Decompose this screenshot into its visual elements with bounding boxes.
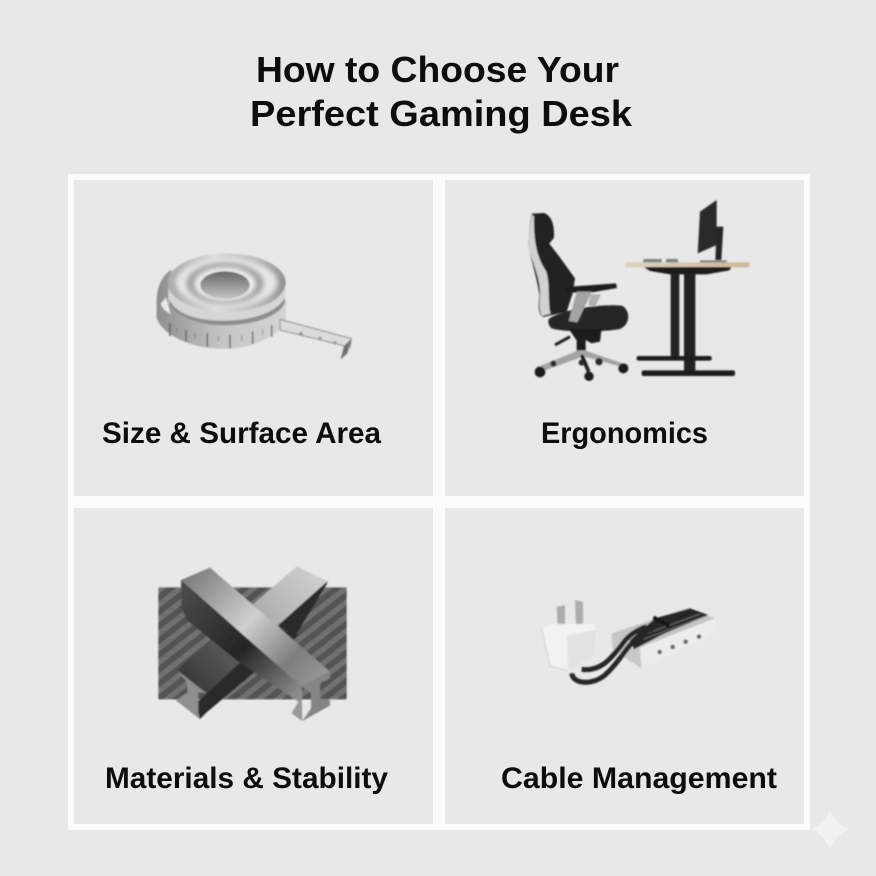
- icon: steel beams on carbon fibre: [158, 567, 347, 721]
- panel: cable management: [501, 600, 777, 795]
- icon: sparkle watermark: [811, 810, 849, 849]
- title: [250, 49, 633, 134]
- panel: size and surface area: [102, 253, 381, 450]
- panel: ergonomics: [529, 200, 749, 450]
- icon: chair and standing desk: [529, 200, 749, 381]
- panel: materials and stability: [105, 567, 388, 795]
- label: cable management: Cable Management: [501, 762, 777, 795]
- title: How to Choose Your: [256, 49, 619, 90]
- icon: measuring tape: [157, 253, 351, 359]
- label: size and surface area: Size & Surface Area: [102, 417, 381, 450]
- label: materials and stability: Materials & Stability: [105, 762, 388, 795]
- label: ergonomics: Ergonomics: [541, 417, 708, 450]
- icon: plug and cable organiser: [542, 600, 715, 682]
- white grid frame: [68, 174, 810, 830]
- title: Perfect Gaming Desk: [250, 93, 633, 134]
